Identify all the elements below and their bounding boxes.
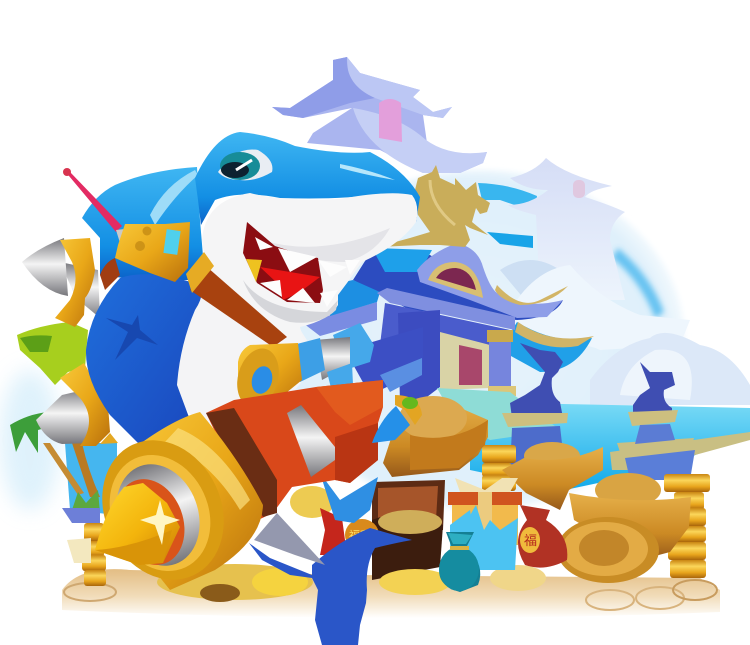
pagoda: far top [272, 57, 487, 173]
clouds [500, 260, 750, 405]
pagoda: pale right [508, 158, 625, 300]
teal vase [439, 532, 480, 592]
gold ingot: right [569, 473, 691, 560]
red lucky bag: 福 [524, 533, 537, 548]
coin stacks [82, 445, 710, 586]
treasure chest [372, 480, 451, 595]
cannon: gold drill tip [95, 483, 180, 565]
shark: lower belly [254, 513, 325, 565]
shark: upper teeth [255, 237, 360, 277]
water [470, 402, 750, 490]
temple [303, 243, 594, 440]
cannon [80, 380, 383, 600]
rocket: lower left [36, 363, 118, 446]
red coral [320, 508, 382, 555]
gift box [448, 478, 522, 545]
gold coin: large [557, 517, 659, 583]
ground: coin base [62, 569, 720, 618]
small scope on the cannon [231, 323, 374, 412]
shark: shoulder strap [190, 267, 287, 347]
shark: eye [218, 149, 272, 180]
shark: white snout and jaw [202, 193, 417, 345]
shark: strap buckle [186, 252, 214, 293]
dragon statue: left [502, 343, 568, 470]
cannon: inner silver ring [103, 452, 213, 578]
gold ingot: behind the cannon [383, 396, 488, 477]
shark: gripping fin [372, 395, 422, 443]
cannon: gold barrel [125, 412, 263, 590]
red coral: 福利点 [349, 528, 382, 542]
palm tree and pedestal [10, 412, 117, 563]
background: sky dome [0, 170, 685, 510]
cannon: silver barrel [287, 405, 335, 477]
blue crystals [450, 505, 518, 570]
temple: pillars and door [440, 332, 490, 390]
shark [63, 132, 420, 645]
shark: blue arm [86, 274, 202, 445]
shark: head top [195, 132, 420, 225]
red lucky bag [518, 505, 567, 568]
temple: lower roof [500, 322, 592, 372]
cannon: brown band [206, 408, 277, 517]
gold coin pile: bottom [157, 486, 546, 602]
shark: mouth [243, 222, 323, 303]
rocket: upper left [22, 238, 100, 327]
temple: steps [437, 388, 560, 440]
shark: dorsal back [82, 167, 205, 280]
cannon: red body [206, 380, 383, 520]
shark: lower jaw shadow [243, 280, 338, 323]
gold dragon roof ornament [377, 165, 490, 247]
temple: upper roof blue [353, 250, 563, 320]
shark: white belly [175, 285, 320, 440]
shark: laser device on the belt [63, 168, 190, 282]
dragon statue: right [617, 362, 695, 480]
shark: lower teeth [260, 280, 338, 307]
cannon: gold ring [80, 420, 246, 600]
shark: lower fin [320, 473, 378, 523]
green backpack part [17, 322, 88, 385]
temple: beam [377, 288, 515, 330]
shark: upper lip shadow [262, 228, 390, 262]
gold ingot: centre right [502, 442, 603, 510]
shark: tail [249, 528, 412, 645]
